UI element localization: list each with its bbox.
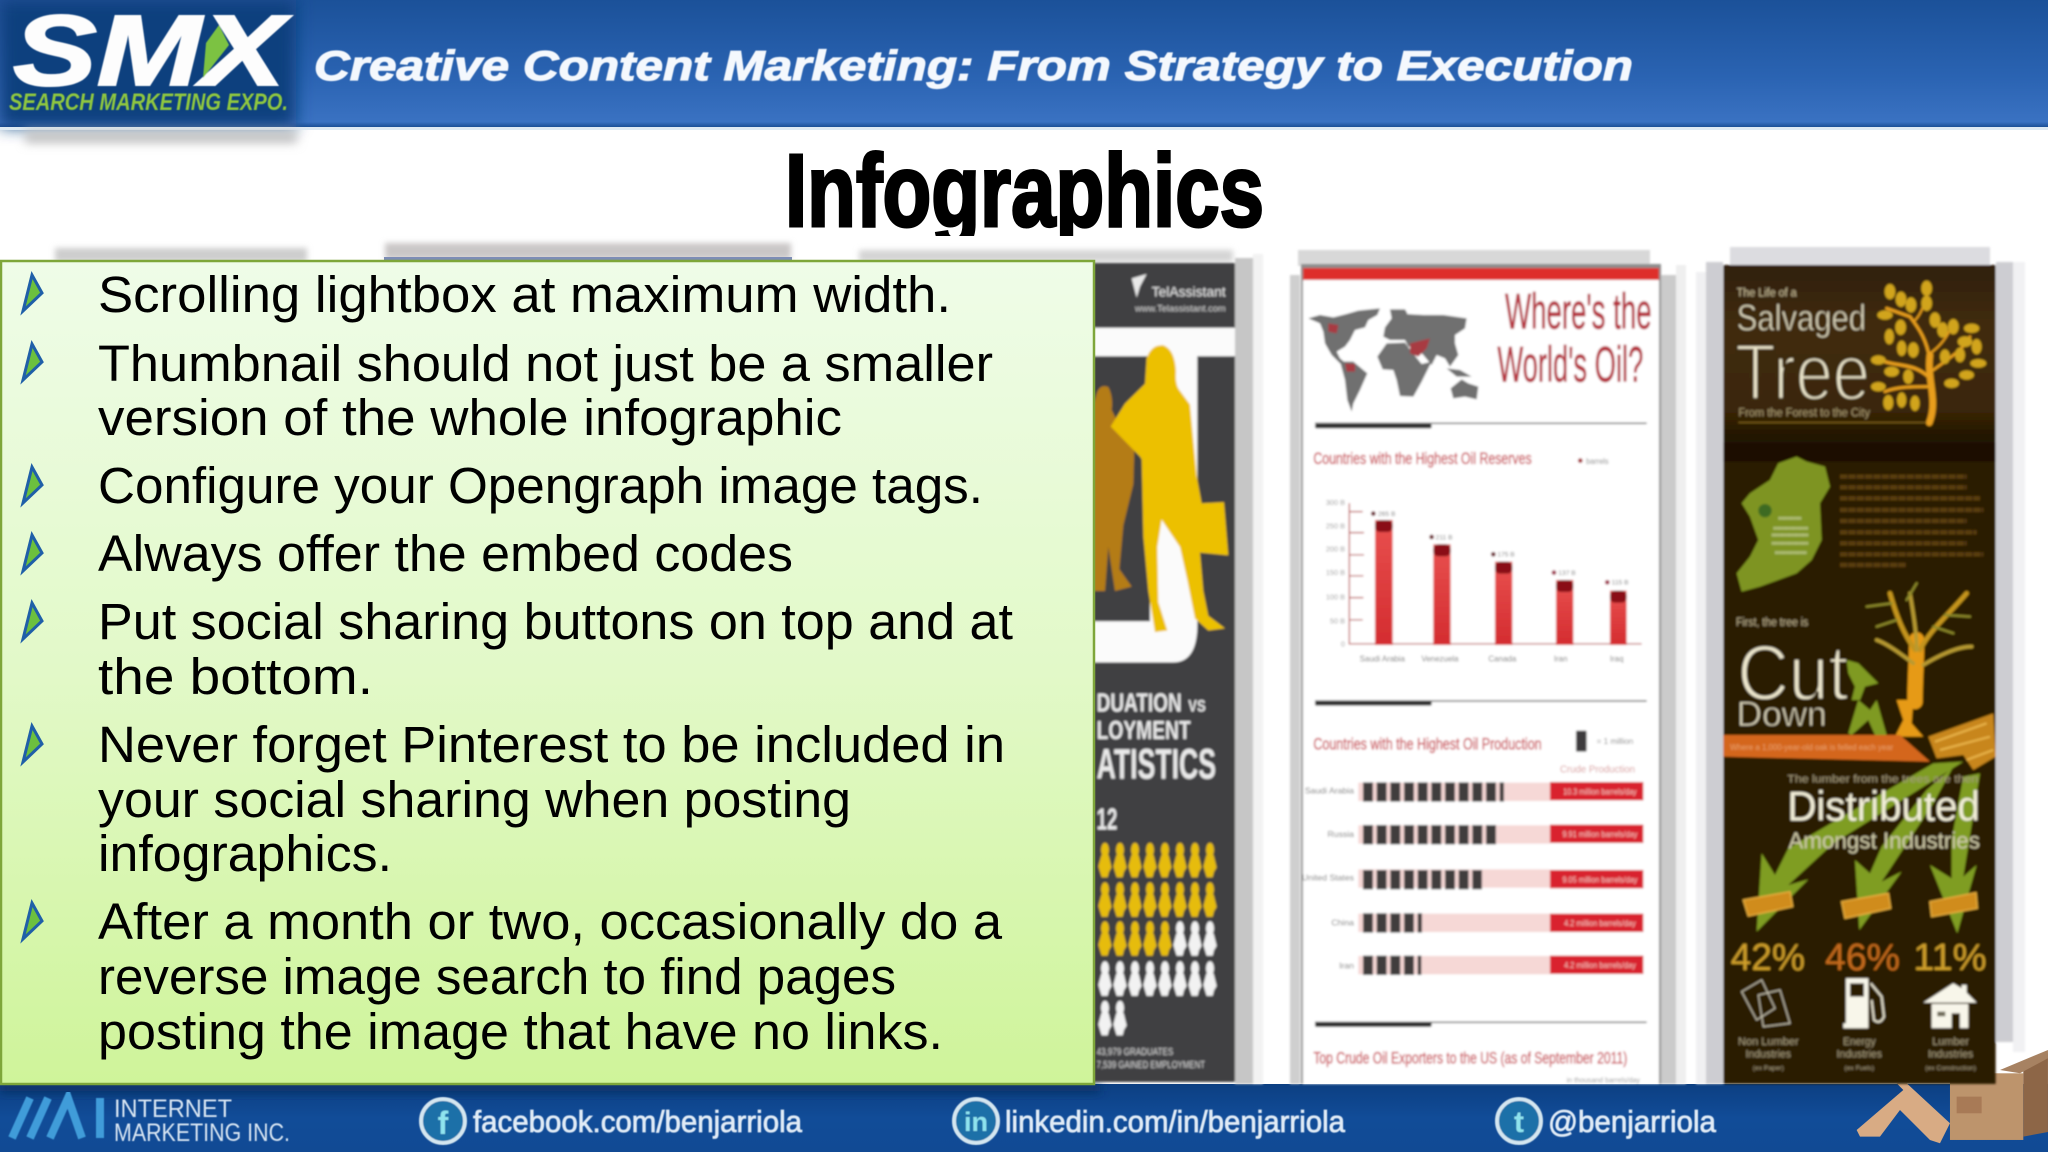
statistic: lumber <box>1913 936 1987 1072</box>
stat caption: 7,539 GAINED EMPLOYMENT <box>1097 1059 1206 1071</box>
distributed heading: Amongst Industries <box>1788 827 1980 853</box>
orange banner: Where a 1,000-year-old oak is felled each year <box>1730 743 1894 752</box>
heading: cut: First, the tree is <box>1736 615 1808 629</box>
infographic thumbnail 2: where's the world's oil <box>1290 250 1686 1085</box>
statistic: non lumber: Non Lumber <box>1738 1036 1799 1048</box>
bullet text: After a month or two, occasionally do a <box>98 893 1003 950</box>
bar chart: oil reserves: 300 B <box>1326 498 1345 507</box>
statistic: energy: Industries <box>1837 1048 1882 1060</box>
icon: cardboard boxes <box>1857 1050 2048 1143</box>
barrel chart: oil production: Crude Production <box>1560 765 1635 776</box>
bar chart: oil reserves: 211 B <box>1436 534 1453 541</box>
distributed heading <box>1787 774 1980 853</box>
barrel chart: oil production: 4.2 million barrels/day <box>1564 918 1636 928</box>
bar chart: oil reserves: 150 B <box>1326 568 1345 577</box>
bullet markers <box>23 275 42 939</box>
sponsor logo <box>1132 274 1227 314</box>
stat caption <box>1097 1045 1206 1071</box>
yellow woman silhouette <box>1111 345 1228 632</box>
bar chart: oil reserves: 175 B <box>1497 552 1515 559</box>
title: salvaged tree: Salvaged <box>1737 297 1866 339</box>
infographic thumbnail 3: life of a salvaged tree: Down <box>1737 695 1827 734</box>
statistic: lumber: Industries <box>1928 1048 1974 1060</box>
linkedin link <box>954 1099 1346 1143</box>
title: salvaged tree: Tree <box>1735 327 1870 416</box>
exporters heading: Top Crude Oil Exporters to the US (as of September 2011) <box>1313 1048 1627 1067</box>
sponsor logo: www.Telassistant.com <box>1134 303 1226 314</box>
bar chart: oil reserves: 100 B <box>1326 592 1345 601</box>
distributed heading: Distributed <box>1787 783 1980 830</box>
statistic: lumber: (ex Construction) <box>1925 1065 1976 1072</box>
bullet text: your social sharing when posting <box>98 771 851 828</box>
bullet text: Scrolling lightbox at maximum width. <box>98 266 951 323</box>
barrel chart: oil production <box>1302 731 1643 974</box>
green arrows <box>1757 762 1980 933</box>
bullet text: the bottom. <box>98 648 373 705</box>
facebook link: facebook.com/benjarriola <box>473 1104 803 1139</box>
map of ireland <box>1737 457 1830 592</box>
facebook link <box>421 1099 803 1143</box>
barrel chart: oil production: = 1 million <box>1597 737 1633 746</box>
barrel chart: oil production: 10.3 million barrels/day <box>1563 786 1637 796</box>
bullet text: Always offer the embed codes <box>98 525 793 582</box>
bar chart: oil reserves: 0 <box>1341 640 1345 649</box>
bullet text: reverse image search to find pages <box>98 948 896 1005</box>
barrel chart: oil production: United States <box>1302 873 1355 883</box>
log pile <box>1928 713 1996 770</box>
brown figure <box>1093 386 1135 591</box>
linkedin link: in <box>964 1107 988 1137</box>
linkedin link: linkedin.com/in/benjarriola <box>1005 1104 1346 1139</box>
bullet text: Configure your Opengraph image tags. <box>98 457 983 514</box>
bar chart: oil reserves: Saudi Arabia <box>1360 654 1406 663</box>
barrel chart: oil production: China <box>1331 918 1354 928</box>
bullet text: infographics. <box>98 825 392 882</box>
ireland description text <box>1840 477 1983 565</box>
bar chart: oil reserves: Iraq <box>1610 654 1624 663</box>
stat heading: VS <box>1188 697 1206 715</box>
twitter link <box>1497 1099 1717 1143</box>
lumberjack figure <box>1847 660 1878 700</box>
infographic thumbnail 3: life of a salvaged tree <box>1696 247 2025 1084</box>
footer bar <box>0 1050 2048 1152</box>
twitter link: t <box>1514 1106 1524 1139</box>
statistic: energy: 46% <box>1825 936 1900 979</box>
bullet text: Thumbnail should not just be a smaller <box>98 335 993 392</box>
logo: Internet Marketing Inc <box>12 1095 290 1147</box>
bar chart: oil reserves: 250 B <box>1326 521 1345 530</box>
panel: tips list <box>1 261 1094 1084</box>
bar chart: oil reserves: 137 B <box>1558 570 1576 577</box>
barrel chart: oil production: Iran <box>1339 960 1354 970</box>
bullet text: version of the whole infographic <box>98 389 842 446</box>
stat heading <box>1097 688 1216 837</box>
statistic: non lumber: Industries <box>1746 1048 1791 1060</box>
bar chart: oil reserves: 265 B <box>1378 511 1396 518</box>
bullet text: Never forget Pinterest to be included in <box>98 716 1005 773</box>
barrel chart: oil production: Russia <box>1328 829 1354 839</box>
statistic: lumber: 11% <box>1913 936 1987 979</box>
facebook link: f <box>438 1105 449 1141</box>
white J shape <box>1093 328 1235 662</box>
header title: Creative Content Marketing: From Strategy to Execution <box>314 42 1633 89</box>
world map <box>1308 308 1478 412</box>
statistic: non lumber: 42% <box>1731 936 1805 979</box>
title: World's Oil? <box>1497 337 1643 393</box>
statistic: non lumber <box>1731 936 1805 1072</box>
statistic: lumber: Lumber <box>1932 1036 1969 1048</box>
bar chart: oil reserves: 200 B <box>1326 545 1345 554</box>
barrel chart: oil production: 9.05 million barrels/day <box>1562 874 1638 884</box>
stat caption: 43,979 GRADUATES <box>1097 1045 1174 1057</box>
twitter link: @benjarriola <box>1548 1104 1717 1139</box>
bar chart: oil reserves <box>1313 449 1642 663</box>
bullet text: Put social sharing buttons on top and at <box>98 593 1013 650</box>
exporters heading <box>1313 1048 1640 1085</box>
bare tree illustration <box>1867 583 1972 702</box>
stat heading: ATISTICS <box>1097 741 1216 788</box>
bar chart: oil reserves: Canada <box>1488 654 1517 663</box>
barrel chart: oil production: Saudi Arabia <box>1305 786 1354 796</box>
statistic: energy: Energy <box>1843 1036 1876 1048</box>
title: salvaged tree <box>1735 286 1927 423</box>
barrel chart: oil production: 9.91 million barrels/day <box>1562 829 1638 839</box>
stat heading: DUATION <box>1097 688 1182 718</box>
slide title: Infographics <box>785 133 1264 248</box>
stat heading: LOYMENT <box>1097 715 1191 745</box>
title: Where's the <box>1505 283 1652 339</box>
logs <box>1743 892 1977 918</box>
header banner <box>0 0 2048 143</box>
bar chart: oil reserves: Iran <box>1554 654 1568 663</box>
orange banner <box>1723 735 1930 762</box>
distributed heading: The lumber from the trees are then <box>1787 774 1978 786</box>
bar chart: oil reserves: Countries with the Highest Oil Reserves <box>1313 449 1532 468</box>
logo: Internet Marketing Inc: MARKETING INC. <box>114 1119 290 1147</box>
people icon chart <box>1098 843 1217 1035</box>
logo: Internet Marketing Inc: INTERNET <box>114 1095 232 1123</box>
barrel chart: oil production: Countries with the Highest Oil Production <box>1313 734 1542 753</box>
heading: cut: Cut <box>1737 628 1849 716</box>
bar chart: oil reserves: Venezuela <box>1421 654 1459 663</box>
title: salvaged tree: From the Forest to the City <box>1738 406 1870 420</box>
shadows of hidden thumbnails <box>55 243 1233 262</box>
tree illustration <box>1871 281 1986 423</box>
title <box>1497 283 1652 393</box>
statistic: energy: (ex Fuels) <box>1845 1065 1874 1072</box>
infographic thumbnail 1: graduation vs employment <box>1093 254 1263 1084</box>
bullet text <box>98 266 1013 1060</box>
bar chart: oil reserves: 115 B <box>1612 580 1629 587</box>
bullet text: posting the image that have no links. <box>98 1003 943 1060</box>
stat heading: 12 <box>1097 803 1117 837</box>
exporters heading: in thousand barrels/day <box>1567 1076 1640 1085</box>
bar chart: oil reserves: barrels <box>1586 457 1609 466</box>
logo: SMX: SEARCH MARKETING EXPO. <box>9 89 288 116</box>
title: salvaged tree: The Life of a <box>1737 286 1797 300</box>
bar chart: oil reserves: 50 B <box>1330 616 1345 625</box>
sponsor logo: TelAssistant <box>1152 284 1227 300</box>
statistic: energy <box>1825 936 1900 1072</box>
barrel chart: oil production: 4.2 million barrels/day <box>1564 960 1636 970</box>
statistic: non lumber: (ex Paper) <box>1753 1065 1784 1072</box>
